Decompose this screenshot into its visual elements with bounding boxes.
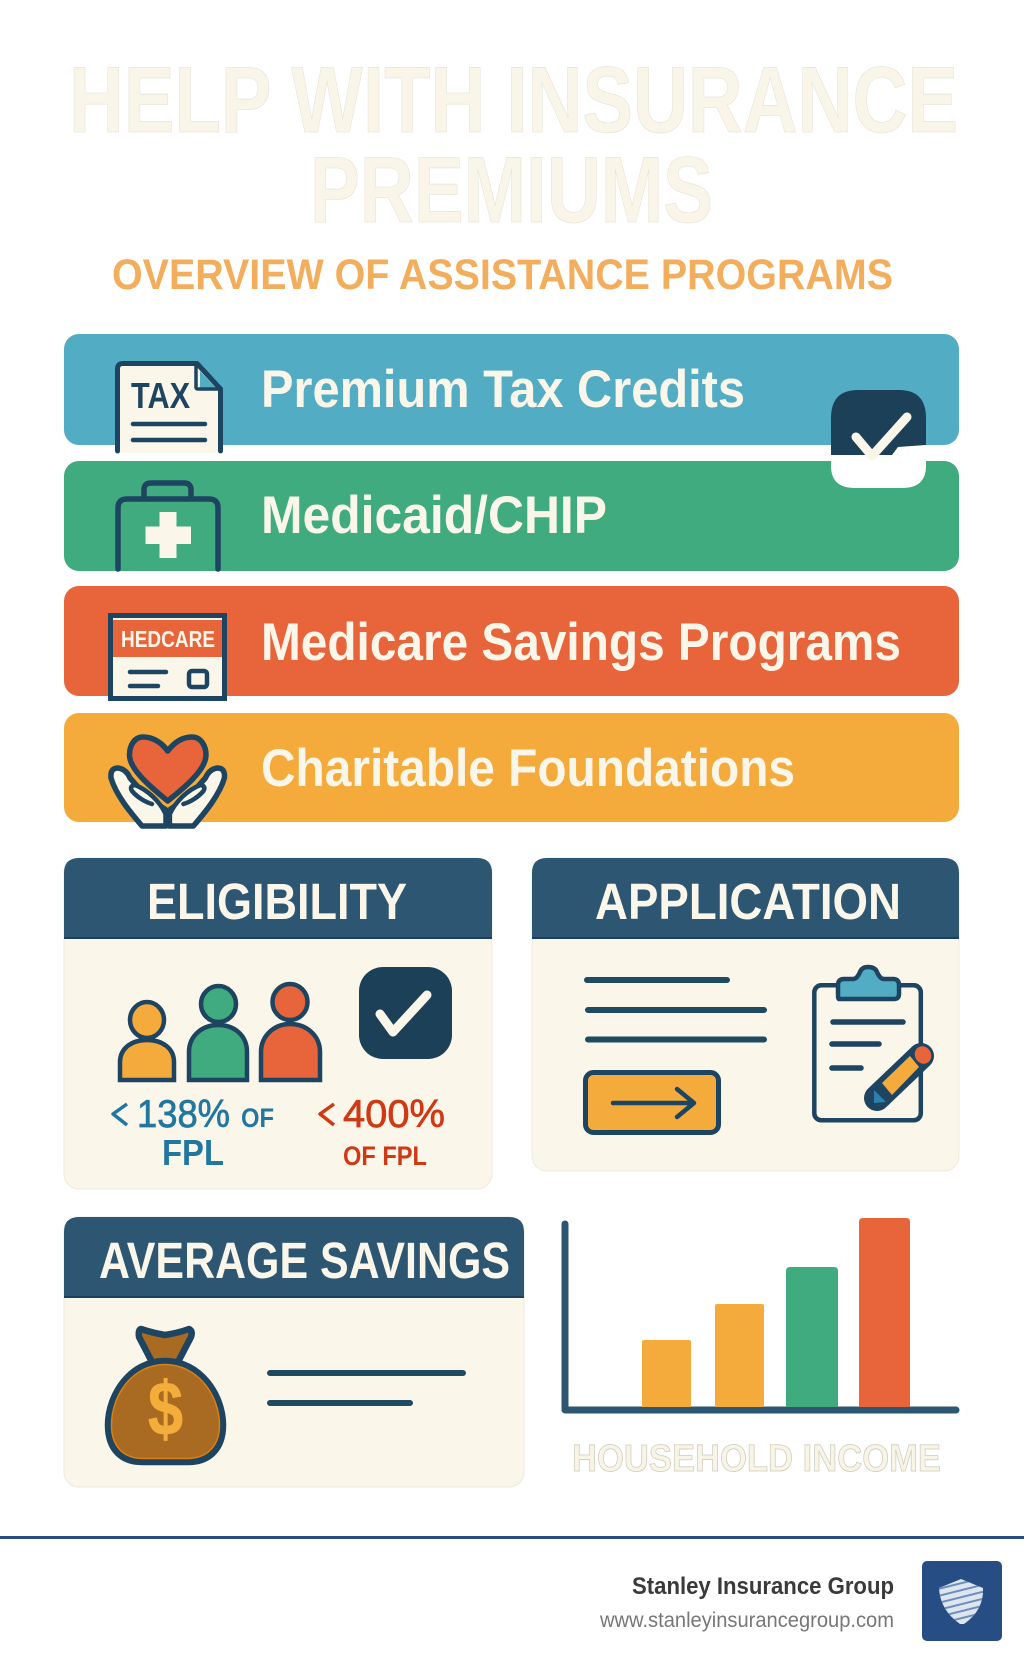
text: under 138 percent of fpl	[113, 1093, 274, 1173]
text: under 400 percent of fpl	[320, 1093, 445, 1171]
label: medicaid/chip: Medicaid/CHIP	[261, 486, 607, 545]
icon: check box	[359, 967, 452, 1059]
icon: clipboard with pencil	[814, 967, 934, 1120]
icon: tax document: TAX	[131, 375, 190, 416]
icon: arrow button	[586, 1072, 718, 1132]
subtitle: OVERVIEW OF ASSISTANCE PROGRAMS	[112, 251, 893, 299]
footer	[0, 1536, 1024, 1641]
bar 4	[859, 1218, 910, 1407]
bar 3	[786, 1267, 838, 1407]
axis label: HOUSEHOLD INCOME	[572, 1438, 941, 1480]
panel: premium tax credits	[64, 334, 959, 453]
bar 2	[715, 1304, 764, 1407]
heading: application: APPLICATION	[595, 873, 901, 930]
icon: shield logo	[922, 1561, 1002, 1641]
text: under 138 percent of fpl: 138%	[137, 1093, 230, 1136]
title	[69, 47, 958, 242]
panel: medicaid/chip	[64, 458, 959, 571]
icon: money bag	[108, 1329, 223, 1462]
text: under 138 percent of fpl: FPL	[162, 1132, 224, 1173]
icon: white notch	[831, 458, 926, 488]
heading: average savings: AVERAGE SAVINGS	[99, 1232, 510, 1289]
panel: application	[532, 858, 959, 1171]
form lines	[587, 980, 764, 1040]
icon: medicare card	[110, 616, 224, 698]
icon: money bag: $	[148, 1367, 183, 1452]
text: under 400 percent of fpl: OF FPL	[343, 1141, 427, 1171]
bar chart: household income	[565, 1218, 956, 1480]
website: www.stanleyinsurancegroup.com	[599, 1609, 894, 1632]
title: PREMIUMS	[310, 137, 713, 242]
icon: check badge	[831, 390, 926, 456]
panel: average savings	[64, 1217, 524, 1487]
savings lines	[270, 1373, 463, 1403]
icon: three people	[120, 984, 320, 1080]
bar 1	[642, 1340, 691, 1407]
label: premium tax credits: Premium Tax Credits	[261, 360, 745, 419]
heading: eligibility: ELIGIBILITY	[147, 873, 407, 930]
panel: medicare savings programs	[64, 586, 959, 698]
panel: eligibility	[64, 858, 492, 1189]
panel: charitable foundations	[64, 713, 959, 826]
company name: Stanley Insurance Group	[632, 1573, 894, 1600]
label: medicare savings programs: Medicare Savings Programs	[261, 613, 901, 672]
label: charitable foundations: Charitable Foundations	[261, 739, 795, 798]
icon: tax document	[118, 364, 220, 453]
icon: medicare card: HEDCARE	[121, 626, 215, 652]
icon: first aid kit	[118, 483, 218, 569]
text: under 138 percent of fpl: OF	[241, 1103, 274, 1133]
text: under 400 percent of fpl: 400%	[343, 1093, 445, 1136]
icon: heart in hands	[111, 737, 225, 826]
